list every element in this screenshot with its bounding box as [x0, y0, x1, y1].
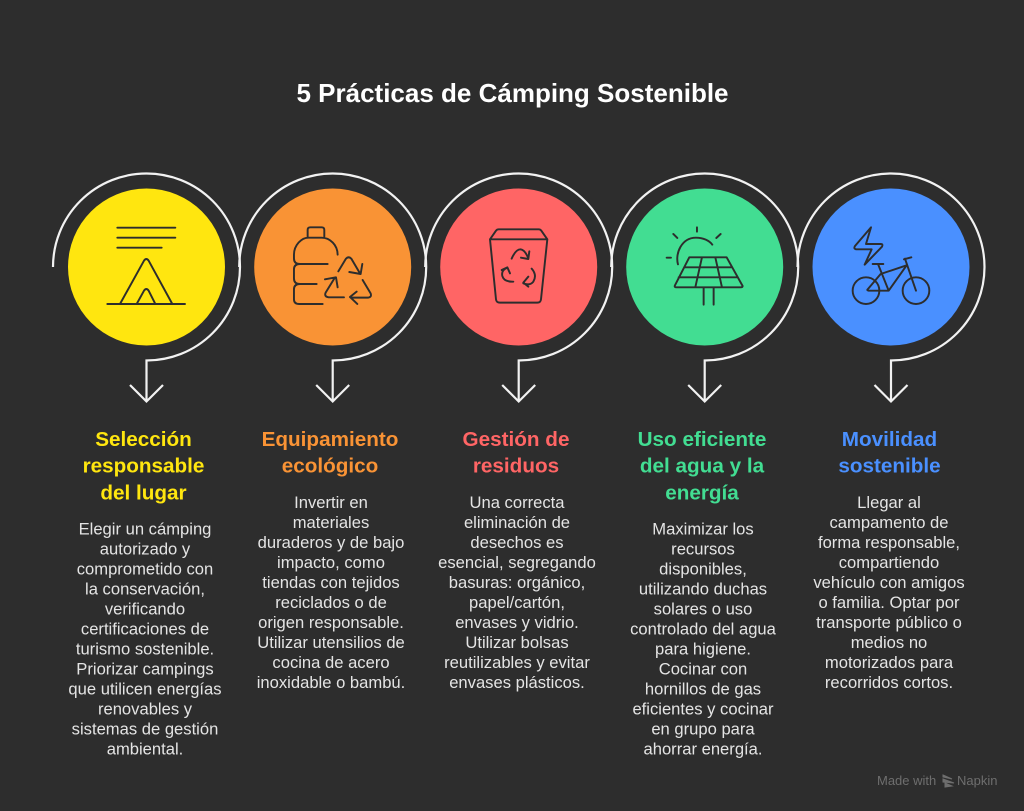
step 3 description: papel/cartón,	[469, 593, 565, 612]
step 5 description: o familia. Optar por	[818, 593, 960, 612]
step 2 description: origen responsable.	[258, 613, 404, 632]
step 5 description: compartiendo	[839, 553, 939, 572]
step 4 description: eficientes y cocinar	[632, 700, 774, 718]
watermark: made with napkin: Made with	[877, 773, 936, 788]
step 1 description: Priorizar campings	[76, 660, 214, 678]
step 5 description: medios no	[851, 633, 927, 652]
step 1 description: que utilicen energías	[68, 680, 222, 698]
icon: tent	[107, 228, 185, 304]
step 4 description: disponibles,	[659, 560, 747, 578]
step 2 heading: Equipamiento	[262, 428, 398, 451]
step 5 description: recorridos cortos.	[825, 673, 953, 692]
step 4 heading: energía	[665, 481, 739, 504]
step 4 description: recursos	[671, 540, 735, 558]
step 1 description: renovables y	[98, 700, 193, 718]
step 3 heading: Gestión de	[463, 428, 569, 451]
step 4 heading: del agua y la	[640, 455, 765, 478]
step 1 description: ambiental.	[107, 740, 183, 758]
step 3 heading: residuos	[473, 455, 559, 478]
step 2 description: tiendas con tejidos	[262, 573, 400, 592]
step 3 description: basuras: orgánico,	[449, 573, 585, 592]
step 3 circle	[440, 188, 597, 346]
step 2 description: Invertir en	[294, 493, 368, 512]
step 4: uso eficiente del agua y la energía	[611, 174, 798, 759]
step 2 description: cocina de acero	[272, 653, 390, 672]
step 1 description: sistemas de gestión	[72, 720, 218, 738]
icon: bottle and recycling	[294, 227, 371, 304]
step 5 heading: sostenible	[838, 455, 941, 478]
step 3 description: Una correcta	[470, 493, 565, 512]
step 3 ring arrow	[425, 174, 612, 402]
step 5: movilidad sostenible	[798, 174, 985, 692]
step 3 description: Utilizar bolsas	[465, 633, 569, 652]
step 5 circle	[812, 188, 970, 346]
step 1 ring arrow	[53, 174, 240, 402]
step 2 description: impacto, como	[277, 553, 385, 572]
step 4 description: utilizando duchas	[639, 580, 767, 598]
step 4 description: Cocinar con	[659, 660, 747, 678]
step 5 heading: Movilidad	[842, 428, 937, 451]
step 4 description: para higiene.	[655, 640, 751, 658]
step 2 description: inoxidable o bambú.	[257, 673, 405, 692]
step 4 description: en grupo para	[651, 720, 755, 738]
icon: electric bicycle	[853, 227, 929, 304]
step 4 description: solares o uso	[654, 600, 752, 618]
step 3: gestión de residuos	[425, 174, 612, 692]
watermark: made with napkin	[877, 773, 997, 788]
step 2 description: materiales	[293, 513, 369, 532]
title: 5 Prácticas de Cámping Sostenible	[296, 78, 729, 108]
step 1 description: autorizado y	[100, 540, 191, 558]
icon: recycling bin	[490, 229, 547, 303]
step 5 description: forma responsable,	[818, 533, 960, 552]
step 4 description: Maximizar los	[652, 520, 754, 538]
step 2 description: duraderos y de bajo	[258, 533, 404, 552]
step 2 description: reciclados o de	[275, 593, 387, 612]
step 5 ring arrow	[798, 174, 985, 402]
step 4 description: ahorrar energía.	[644, 740, 762, 758]
step 1: selección responsable del lugar	[53, 174, 240, 759]
step 1 circle	[68, 188, 225, 346]
step 3 description: desechos es	[470, 533, 564, 552]
watermark: made with napkin: Napkin	[957, 773, 997, 788]
step 1 heading: del lugar	[100, 481, 187, 504]
step 1 description: comprometido con	[77, 560, 213, 578]
step 4 ring arrow	[611, 174, 798, 402]
step 2 description: Utilizar utensilios de	[257, 633, 405, 652]
step 5 description: transporte público o	[816, 613, 962, 632]
step 1 description: la conservación,	[85, 580, 205, 598]
step 3 description: envases plásticos.	[449, 673, 585, 692]
step 4 heading: Uso eficiente	[638, 428, 766, 451]
step 5 description: campamento de	[830, 513, 948, 532]
step 5 description: Llegar al	[857, 493, 921, 512]
step 3 description: envases y vidrio.	[455, 613, 579, 632]
step 3 description: eliminación de	[464, 513, 570, 532]
step 1 heading: Selección	[95, 428, 192, 451]
step 1 description: Elegir un cámping	[79, 520, 211, 538]
step 5 description: vehículo con amigos	[813, 573, 965, 592]
step 2 ring arrow	[239, 174, 426, 402]
step 1 description: certificaciones de	[81, 620, 209, 638]
step 3 description: reutilizables y evitar	[444, 653, 590, 672]
step 4 description: controlado del agua	[630, 620, 777, 638]
step 1 description: verificando	[105, 600, 185, 618]
step 2 circle	[254, 188, 411, 346]
step 2: equipamiento ecológico	[239, 174, 426, 692]
step 5 description: motorizados para	[825, 653, 954, 672]
step 4 circle	[626, 188, 783, 346]
step 1 description: turismo sostenible.	[76, 640, 214, 658]
icon: sun and solar panel	[667, 227, 743, 305]
step 3 description: esencial, segregando	[438, 553, 596, 572]
step 2 heading: ecológico	[282, 455, 378, 478]
step 4 description: hornillos de gas	[645, 680, 761, 698]
step 1 heading: responsable	[83, 455, 204, 478]
